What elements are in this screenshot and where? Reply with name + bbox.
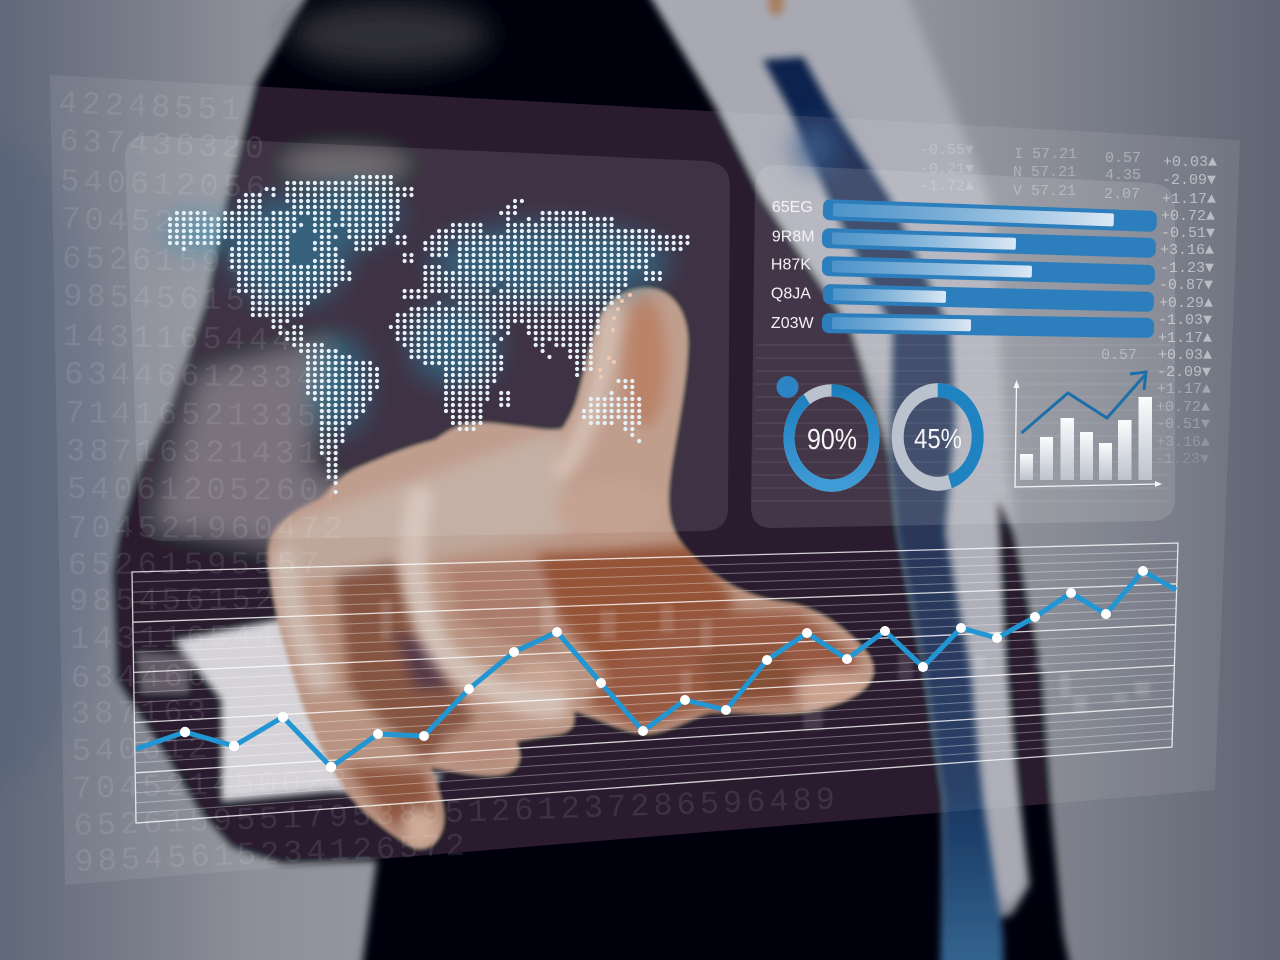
bar 9R8M: 9R8M — [772, 228, 815, 245]
bar chart: horizontal bars — [770, 197, 1157, 338]
axes — [1015, 385, 1157, 487]
ticker: value column: 2.07 — [1104, 186, 1140, 203]
ticker: change column: -2.09▼ — [1162, 172, 1216, 189]
right lapel — [985, 500, 1074, 960]
ticker: index column: N 57.21 — [1013, 164, 1076, 181]
number columns on the left: 65261595557 — [68, 546, 323, 584]
bar 65EG: 65EG — [772, 199, 813, 216]
chart: line chart with grid — [132, 543, 1178, 823]
icon: neck skin — [768, 0, 784, 16]
number columns on the left: 540612 — [71, 730, 211, 770]
ticker: index column: I 57.21 — [1014, 146, 1077, 163]
bar H87K — [770, 255, 1155, 285]
panel: world map — [125, 136, 730, 541]
ticker: change column: +0.03▲ — [1163, 154, 1217, 171]
number columns on the left: 652615955 — [62, 240, 272, 283]
donut: 45%: 45% — [914, 425, 962, 454]
number columns on the left: 1431165444 — [63, 318, 296, 360]
arrow — [1022, 372, 1146, 433]
ticker: change column: -2.09▼ — [1157, 364, 1211, 381]
number columns on the left: 42248551 — [58, 85, 245, 130]
donut: 90%: 90% — [807, 423, 857, 455]
ticker: change column: +1.17▲ — [1157, 381, 1211, 398]
ticker: change column: -0.51▼ — [1156, 416, 1210, 433]
tie — [763, 57, 1004, 960]
bar Q8JA — [770, 283, 1154, 312]
hand: shading — [276, 296, 868, 847]
hand: knuckle ridges — [285, 310, 612, 705]
bar 9R8M — [771, 226, 1156, 258]
bar H87K: H87K — [771, 257, 811, 274]
ticker: change column: +3.16▲ — [1160, 242, 1214, 259]
sleeve highlights — [150, 1, 833, 555]
minor grid lines — [132, 551, 1178, 813]
mini column chart with rising arrow — [1014, 372, 1162, 487]
ticker: faded column: -0.55▼ — [920, 142, 974, 159]
number columns on the left: 704521960472 — [68, 510, 347, 548]
map dots seen on the finger — [598, 293, 632, 379]
ticker: index column — [1013, 146, 1077, 200]
donut: 45% — [898, 390, 978, 484]
ticker: change column: -1.23▼ — [1155, 451, 1209, 468]
ticker: change column: +3.16▲ — [1156, 434, 1210, 451]
ticker: value column — [1101, 150, 1141, 364]
number columns on the left: 704521960 — [61, 201, 271, 245]
number columns on the left: 637436320 — [59, 123, 269, 168]
number columns on the right — [920, 142, 1217, 468]
ticker: index column: V 57.21 — [1013, 183, 1076, 200]
major grid lines and frame — [132, 543, 1178, 823]
panel scan lines — [752, 345, 1170, 501]
ticker: faded column: -0.21▼ — [920, 161, 974, 178]
ticker: change column: +1.17▲ — [1158, 330, 1212, 347]
ticker: faded column: -1.72▲ — [920, 178, 974, 195]
panel: metrics — [751, 165, 1175, 528]
shirt cuff — [135, 617, 445, 802]
ticker: change column: -0.87▼ — [1159, 277, 1213, 294]
panel background — [751, 165, 1175, 528]
ticker: faded column — [920, 142, 974, 195]
ghost candlesticks — [380, 600, 1150, 730]
panel background — [125, 136, 730, 541]
ticker: value column: 0.57 — [1105, 150, 1141, 167]
number columns on the left: 704521450023 — [72, 763, 352, 808]
line series — [136, 571, 1176, 767]
number columns on the left: 540612056 — [60, 163, 270, 207]
bar Z03W: Z03W — [771, 315, 814, 332]
map glow — [160, 185, 670, 435]
ticker: change column: -1.03▼ — [1158, 312, 1212, 329]
suit jacket — [114, 0, 950, 960]
ticker: change column — [1155, 154, 1217, 468]
ticker: change column: +0.03▲ — [1158, 347, 1212, 364]
number columns on the left: 540612052607 — [67, 471, 346, 510]
number columns on the left — [58, 85, 840, 881]
number columns on the left: 714165213350 — [65, 395, 344, 436]
ticker: change column: +0.72▲ — [1161, 208, 1215, 225]
donut: 90% — [776, 376, 874, 486]
ticker: value column: 4.35 — [1105, 167, 1141, 184]
ticker: value column: 0.57 — [1101, 347, 1137, 364]
shirt — [640, 0, 1028, 905]
line markers — [180, 566, 1148, 772]
bar Z03W — [771, 312, 1154, 338]
columns — [1020, 397, 1152, 480]
bar Q8JA: Q8JA — [771, 286, 811, 303]
number columns on the left: 652615955179538951261237286596489 — [73, 781, 840, 845]
number columns on the left: 143116544 — [70, 619, 279, 658]
ticker: change column: -1.23▼ — [1160, 260, 1214, 277]
ticker: change column: +0.29▲ — [1159, 295, 1213, 312]
glass sheet — [50, 75, 1240, 885]
number columns on the left: 98545615234126572 — [74, 828, 470, 881]
hand: base skin — [250, 270, 890, 870]
number columns on the left: 634466 — [71, 658, 210, 697]
icon: small blue dot — [776, 376, 798, 398]
ticker: change column: +0.72▲ — [1156, 399, 1210, 416]
number columns on the left: 985456152 — [69, 582, 278, 620]
number columns on the left: 387163 — [71, 694, 210, 733]
dotted world map — [170, 177, 688, 492]
ticker: change column: +1.17▲ — [1162, 191, 1216, 208]
number columns on the left: 634466123346 — [64, 356, 343, 398]
number columns on the left: 985456152 — [63, 278, 272, 320]
hand — [250, 270, 890, 870]
number columns on the left: 387163214310 — [66, 433, 345, 473]
bar 65EG — [771, 197, 1157, 232]
axis arrowheads — [1014, 380, 1162, 487]
ticker: change column: -0.51▼ — [1161, 225, 1215, 242]
